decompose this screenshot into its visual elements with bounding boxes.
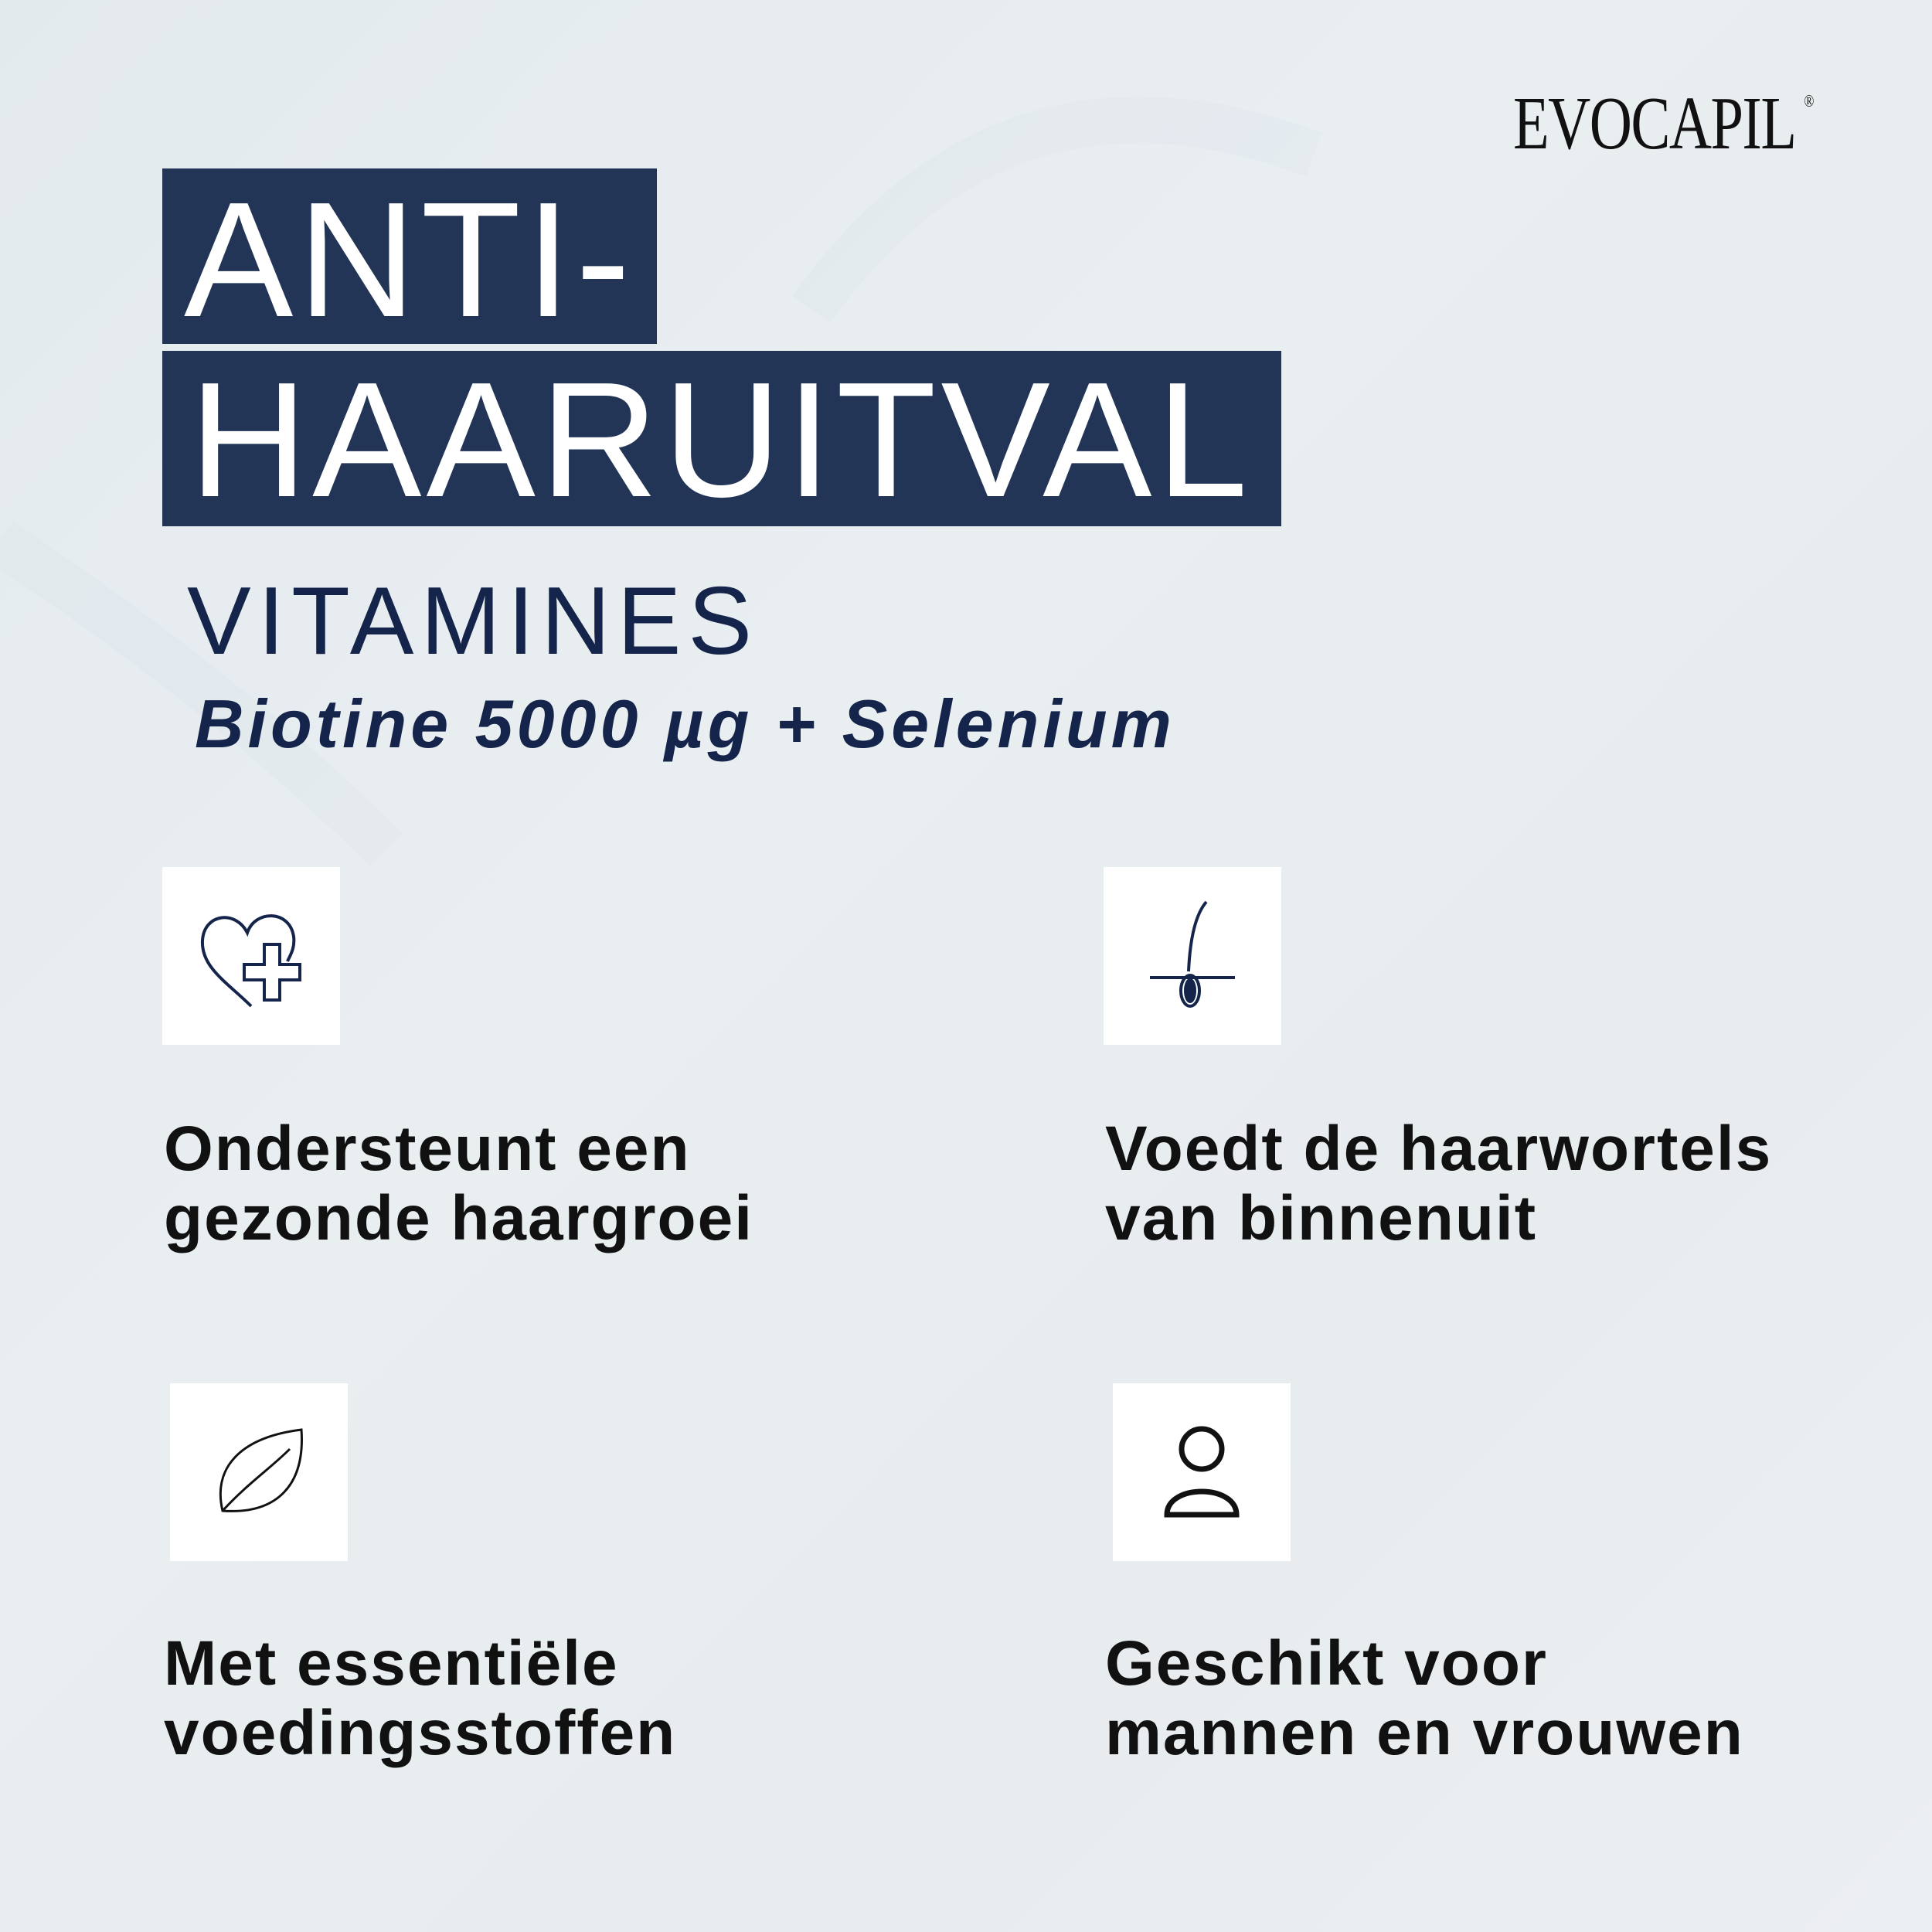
feature text 1: Ondersteunt een bbox=[164, 1114, 691, 1184]
feature text 4 bbox=[1105, 1628, 1744, 1768]
icon: person bbox=[1113, 1383, 1291, 1561]
feature text 4: Geschikt voor bbox=[1105, 1628, 1548, 1699]
feature text 2: van binnenuit bbox=[1105, 1183, 1537, 1253]
title line 1: ANTI- bbox=[184, 168, 635, 351]
feature text 2: Voedt de haarwortels bbox=[1105, 1114, 1772, 1184]
icon: hair follicle bbox=[1104, 867, 1281, 1045]
feature text 3: Met essentiële bbox=[164, 1628, 619, 1699]
subtitle: VITAMINES bbox=[187, 568, 759, 675]
icon: leaf bbox=[170, 1383, 348, 1561]
ingredients: Biotine 5000 µg + Selenium bbox=[195, 685, 1175, 762]
feature text 3: voedingsstoffen bbox=[164, 1698, 676, 1768]
icon: heart with cross bbox=[162, 867, 340, 1045]
title line 2: HAARUITVAL bbox=[189, 348, 1252, 531]
feature text 3 bbox=[164, 1628, 676, 1768]
feature text 4: mannen en vrouwen bbox=[1105, 1698, 1744, 1768]
feature text 1 bbox=[164, 1114, 753, 1253]
feature text 2 bbox=[1105, 1114, 1772, 1253]
logo: EVOCAPIL ® bbox=[1513, 82, 1813, 165]
feature text 1: gezonde haargroei bbox=[164, 1183, 753, 1253]
